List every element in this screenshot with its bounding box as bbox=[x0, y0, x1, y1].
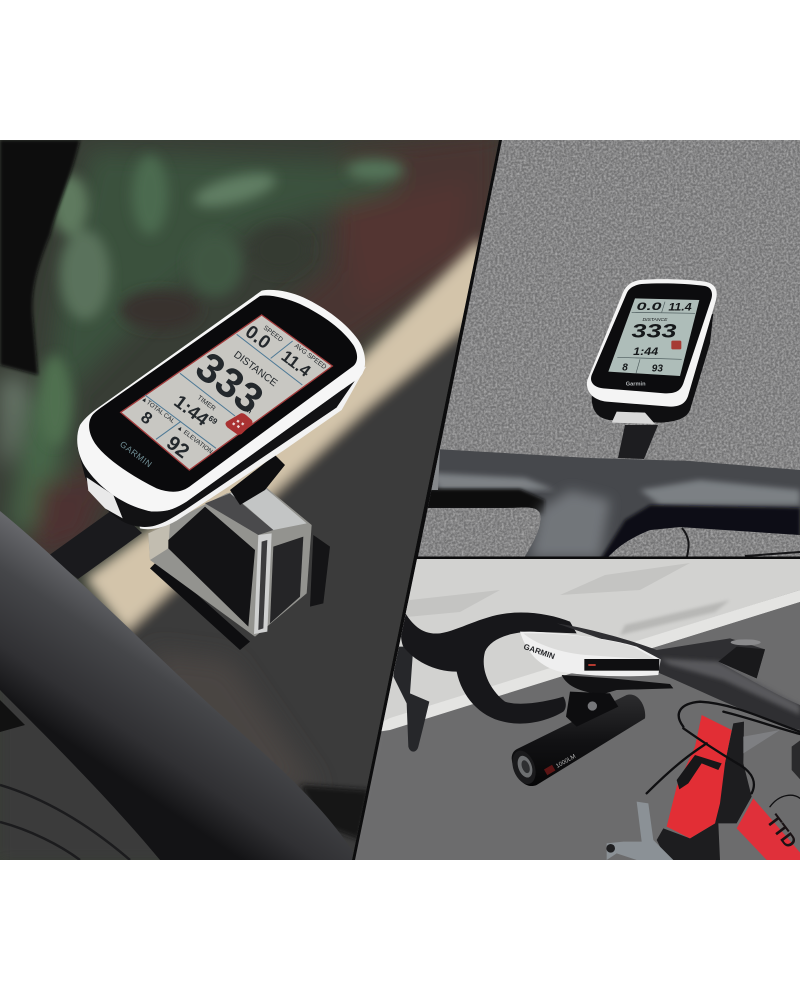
speed field: 92 bbox=[162, 432, 193, 463]
cable bbox=[682, 528, 800, 557]
front light: 1000LM bbox=[555, 754, 577, 770]
side window bbox=[270, 537, 303, 623]
right highlight band bbox=[640, 480, 800, 505]
bike frame bbox=[657, 715, 800, 860]
elevation field: ▲ ELEVATION bbox=[175, 424, 214, 456]
left highlight band bbox=[430, 473, 555, 490]
screen: 93 bbox=[652, 364, 663, 375]
white shell bbox=[77, 290, 365, 512]
caliper bbox=[607, 802, 673, 860]
small bike computer bbox=[587, 279, 717, 424]
stem wing bbox=[557, 623, 800, 730]
mount under computer bbox=[230, 455, 285, 505]
screen: 1:44 bbox=[633, 346, 658, 358]
bezel bbox=[591, 283, 712, 393]
distance field: DISTANCE bbox=[231, 349, 279, 389]
screen: 333 bbox=[631, 321, 677, 342]
road surface tint bbox=[162, 655, 304, 784]
icon: red flag button bbox=[225, 413, 252, 435]
panel: top-right photo, computer seen from above bbox=[417, 140, 800, 560]
speed field: 11.4 bbox=[278, 347, 315, 381]
drop handlebar bbox=[401, 610, 577, 724]
road bbox=[355, 559, 800, 860]
dark camera face bbox=[168, 507, 255, 627]
side slot bbox=[149, 389, 343, 512]
base wedge bbox=[612, 412, 655, 424]
dark base bbox=[592, 313, 713, 423]
speed field: 1:44 bbox=[170, 391, 213, 430]
dark lower body bbox=[77, 373, 360, 527]
foliage blotches bbox=[39, 155, 403, 445]
screen: DISTANCE bbox=[642, 317, 668, 323]
leg highlight bbox=[530, 490, 610, 558]
speed field: AVG SPEED bbox=[293, 343, 328, 371]
light rails bbox=[254, 533, 272, 634]
black bezel bbox=[89, 296, 357, 492]
action mount bbox=[566, 692, 618, 727]
speed field: 333 bbox=[187, 342, 273, 423]
frame lettering: TTD bbox=[763, 810, 800, 852]
speed field bbox=[137, 321, 328, 463]
strap bbox=[618, 425, 658, 459]
asphalt bbox=[417, 140, 800, 560]
carbon strap bbox=[48, 508, 142, 579]
screen bbox=[608, 298, 699, 376]
rear clip bbox=[310, 535, 330, 607]
computer mount arm bbox=[562, 675, 673, 694]
white lower wedge bbox=[87, 477, 123, 518]
screen bbox=[121, 315, 332, 470]
brake lever bbox=[393, 647, 429, 752]
panel: left photo, main computer with action camera bbox=[0, 130, 500, 860]
cables bbox=[647, 702, 800, 807]
clear top bbox=[230, 487, 307, 530]
action camera housing bbox=[148, 485, 330, 650]
speed field: SPEED bbox=[262, 325, 284, 344]
left black frame part bbox=[0, 140, 80, 375]
wheel spokes bbox=[0, 785, 130, 860]
left underside bbox=[420, 489, 545, 516]
pavement bbox=[357, 559, 800, 735]
speed field: m bbox=[244, 406, 253, 415]
screen dividers bbox=[145, 334, 302, 448]
right underside bbox=[600, 505, 800, 560]
garmin logo: Garmin bbox=[626, 382, 646, 388]
garmin logo: GARMIN bbox=[522, 642, 556, 661]
screen: 0.0 bbox=[636, 301, 663, 313]
photo collage bbox=[0, 140, 800, 860]
screen: 8 bbox=[622, 363, 628, 374]
timer field: TIMER bbox=[196, 394, 217, 413]
panel: bottom-right photo, computer and front light under bars bbox=[355, 559, 800, 860]
speed field: 0.0 bbox=[242, 321, 275, 353]
clear shell bbox=[148, 485, 312, 637]
speed field: 69 bbox=[207, 414, 220, 427]
main bike computer bbox=[77, 290, 366, 529]
handlebar bbox=[417, 445, 800, 560]
white shell bbox=[587, 279, 717, 407]
total calories field: ▲TOTAL CAL bbox=[140, 395, 176, 425]
screen: 11.4 bbox=[668, 302, 692, 314]
dark divider lines behind panels bbox=[0, 140, 800, 860]
blurred background bbox=[0, 130, 500, 860]
front light bbox=[508, 695, 645, 787]
garmin logo: GARMIN bbox=[118, 439, 154, 470]
base plate bbox=[150, 560, 250, 650]
large handlebar bbox=[0, 511, 353, 860]
top computer side view bbox=[520, 632, 661, 676]
speed field: 8 bbox=[137, 408, 156, 428]
white lower edge bbox=[137, 367, 366, 529]
